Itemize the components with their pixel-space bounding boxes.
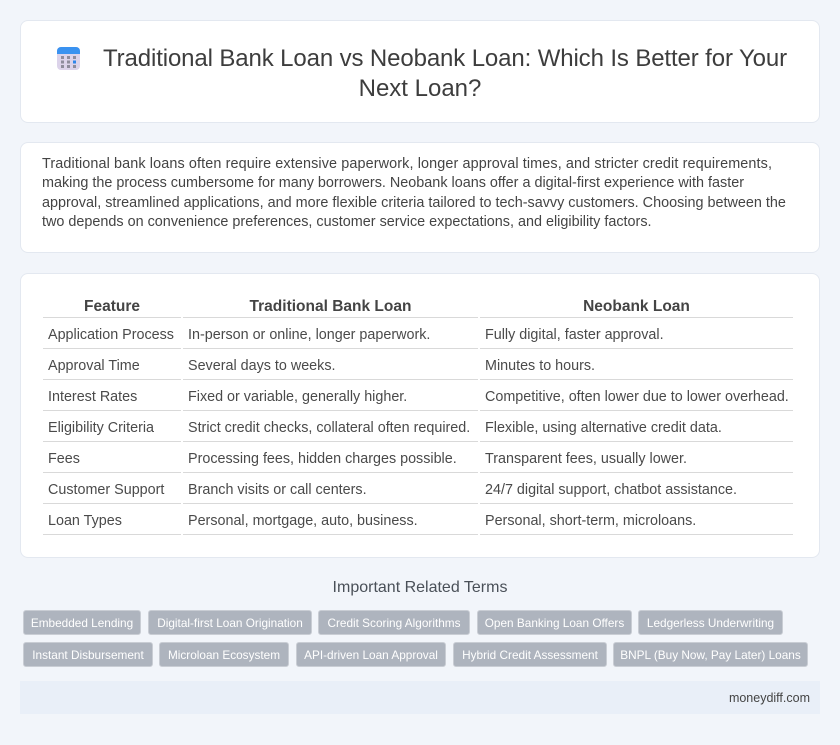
row: Loan Types xyxy=(48,513,696,529)
row: Loan Types: Loan Types xyxy=(48,513,122,529)
tag: BNPL (Buy Now, Pay Later) Loans: BNPL (Buy Now, Pay Later) Loans xyxy=(620,648,801,662)
row: Approval Time: Several days to weeks. xyxy=(188,358,336,374)
intro text: approval, streamlined applications, and more flexible criteria tailored to tech-savvy customers. Choosing between the xyxy=(42,195,786,211)
tag: API-driven Loan Approval: API-driven Loan Approval xyxy=(304,648,438,662)
row: Eligibility Criteria: Eligibility Criteria xyxy=(48,420,154,436)
tag: Digital-first Loan Origination xyxy=(148,610,312,635)
row: Approval Time: Approval Time xyxy=(48,358,140,374)
icon: calendar xyxy=(57,47,80,70)
panel: comparison table xyxy=(20,273,820,558)
tag: Instant Disbursement xyxy=(23,642,153,667)
row: Application Process: Fully digital, faster approval. xyxy=(485,327,664,343)
intro text: Traditional bank loans often require extensive paperwork, longer approval times, and stricter credit requirements, xyxy=(42,156,772,172)
row: Interest Rates: Competitive, often lower due to lower overhead. xyxy=(485,389,789,405)
tag: Microloan Ecosystem xyxy=(159,642,289,667)
row: Fees xyxy=(48,451,687,467)
intro text: two depends on convenience preferences, customer service expectations, and eligibility factors. xyxy=(42,214,652,230)
row: Customer Support: 24/7 digital support, chatbot assistance. xyxy=(485,482,737,498)
tag: Hybrid Credit Assessment xyxy=(453,642,607,667)
tag: Ledgerless Underwriting: Ledgerless Underwriting xyxy=(647,616,774,630)
panel: introduction xyxy=(20,142,820,253)
tag: Open Banking Loan Offers: Open Banking Loan Offers xyxy=(485,616,624,630)
title xyxy=(103,45,787,102)
tag: Microloan Ecosystem: Microloan Ecosystem xyxy=(168,648,280,662)
row: Application Process xyxy=(48,327,664,343)
row: Application Process: Application Process xyxy=(48,327,174,343)
row: Interest Rates: Interest Rates xyxy=(48,389,137,405)
row: Fees: Transparent fees, usually lower. xyxy=(485,451,687,467)
tag: Digital-first Loan Origination: Digital-first Loan Origination xyxy=(157,616,303,630)
tag: API-driven Loan Approval xyxy=(296,642,446,667)
tag: Credit Scoring Algorithms: Credit Scoring Algorithms xyxy=(327,616,461,630)
row: Interest Rates: Fixed or variable, generally higher. xyxy=(188,389,407,405)
row: Interest Rates xyxy=(48,389,789,405)
row: Customer Support xyxy=(48,482,737,498)
tag: Embedded Lending: Embedded Lending xyxy=(31,616,133,630)
row: Loan Types: Personal, mortgage, auto, business. xyxy=(188,513,418,529)
tag: Ledgerless Underwriting xyxy=(638,610,783,635)
row: Approval Time: Minutes to hours. xyxy=(485,358,595,374)
tag: Credit Scoring Algorithms xyxy=(318,610,470,635)
row: Eligibility Criteria: Strict credit checks, collateral often required. xyxy=(188,420,470,436)
table header: Neobank Loan: Neobank Loan xyxy=(583,298,690,315)
row: Customer Support: Branch visits or call centers. xyxy=(188,482,367,498)
table header: Traditional Bank Loan: Traditional Bank Loan xyxy=(250,298,411,315)
intro text xyxy=(42,156,786,230)
tag: Instant Disbursement: Instant Disbursement xyxy=(32,648,144,662)
row: Approval Time xyxy=(48,358,595,374)
row: Fees: Processing fees, hidden charges possible. xyxy=(188,451,457,467)
heading: Important Related Terms: Important Related Terms xyxy=(333,579,507,596)
tag: Open Banking Loan Offers xyxy=(477,610,632,635)
footer source text: moneydiff.com xyxy=(729,691,810,705)
panel: title header xyxy=(20,20,820,123)
title: Next Loan? xyxy=(359,75,481,102)
row: Loan Types: Personal, short-term, microloans. xyxy=(485,513,696,529)
row: Fees: Fees xyxy=(48,451,80,467)
table header: Feature: Feature xyxy=(84,298,140,315)
intro text: making the process cumbersome for many borrowers. Neobank loans offer a digital-first experience with faster xyxy=(42,175,744,191)
tag: Hybrid Credit Assessment: Hybrid Credit Assessment xyxy=(462,648,598,662)
row: Eligibility Criteria xyxy=(48,420,722,436)
row: Customer Support: Customer Support xyxy=(48,482,164,498)
row: Application Process: In-person or online, longer paperwork. xyxy=(188,327,430,343)
tag: Embedded Lending xyxy=(23,610,141,635)
footer bar xyxy=(20,681,820,714)
row: Eligibility Criteria: Flexible, using alternative credit data. xyxy=(485,420,722,436)
title: Traditional Bank Loan vs Neobank Loan: Which Is Better for Your xyxy=(103,45,787,72)
tag: BNPL (Buy Now, Pay Later) Loans xyxy=(613,642,808,667)
